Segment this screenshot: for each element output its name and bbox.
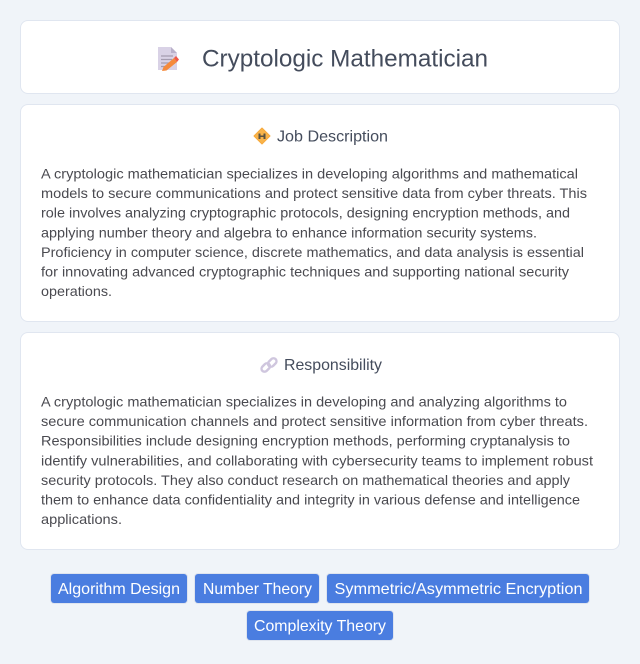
panel: responsibility	[20, 332, 620, 550]
text block: responsibility: identify vulnerabilities, and collaborating with cybersecurity teams to implement robust	[41, 452, 593, 468]
text block: job description	[41, 166, 587, 299]
tag: complexity theory: Complexity Theory	[254, 618, 386, 635]
text block: responsibility: secure communication channels and protect sensitive information from cyber threats.	[41, 413, 588, 429]
text block: job description: role involves analyzing cryptographic protocols, designing encryption methods, and	[41, 205, 570, 221]
icon: chain link	[260, 357, 278, 373]
text block: responsibility: them to enhance data confidentiality and integrity in various defense and intelligence	[41, 492, 580, 508]
text block: job description: models to secure communications and protect sensitive data from cyber threats. This	[41, 185, 587, 201]
text block: job description: Proficiency in computer science, discrete mathematics, and data analysis is essential	[41, 244, 584, 260]
text block: job description: applying number theory and algebra to enhance information security systems.	[41, 224, 537, 240]
text block: job description: operations.	[41, 283, 112, 299]
panel: title card	[20, 20, 620, 94]
tag: number theory: Number Theory	[203, 581, 312, 598]
tag: symmetric/asymmetric encryption	[327, 574, 589, 603]
tag: algorithm design	[51, 574, 187, 603]
icon: orange warning diamond	[254, 128, 270, 144]
panel: job description	[20, 104, 620, 322]
text block: responsibility: applications.	[41, 511, 122, 527]
tag: number theory	[195, 574, 319, 603]
title: Cryptologic Mathematician	[202, 46, 488, 72]
heading: responsibility: Responsibility	[284, 357, 382, 374]
text block: responsibility: A cryptologic mathematician specializes in developing and analyzing algorithms to	[41, 394, 567, 410]
text block: responsibility: Responsibilities include designing encryption methods, performing cryptanalysis to	[41, 433, 570, 449]
text block: responsibility: security protocols. They also conduct research on mathematical theories and apply	[41, 472, 570, 488]
heading: job description: Job Description	[277, 128, 388, 146]
tag: symmetric/asymmetric encryption: Symmetric/Asymmetric Encryption	[334, 581, 582, 598]
text block: job description: A cryptologic mathematician specializes in developing algorithms and mathematical	[41, 166, 578, 182]
tag: algorithm design: Algorithm Design	[58, 581, 180, 598]
tag: complexity theory	[247, 611, 393, 640]
icon: document with pencil	[158, 47, 179, 71]
text block: job description: for innovating advanced cryptographic techniques and supporting national security	[41, 264, 569, 280]
